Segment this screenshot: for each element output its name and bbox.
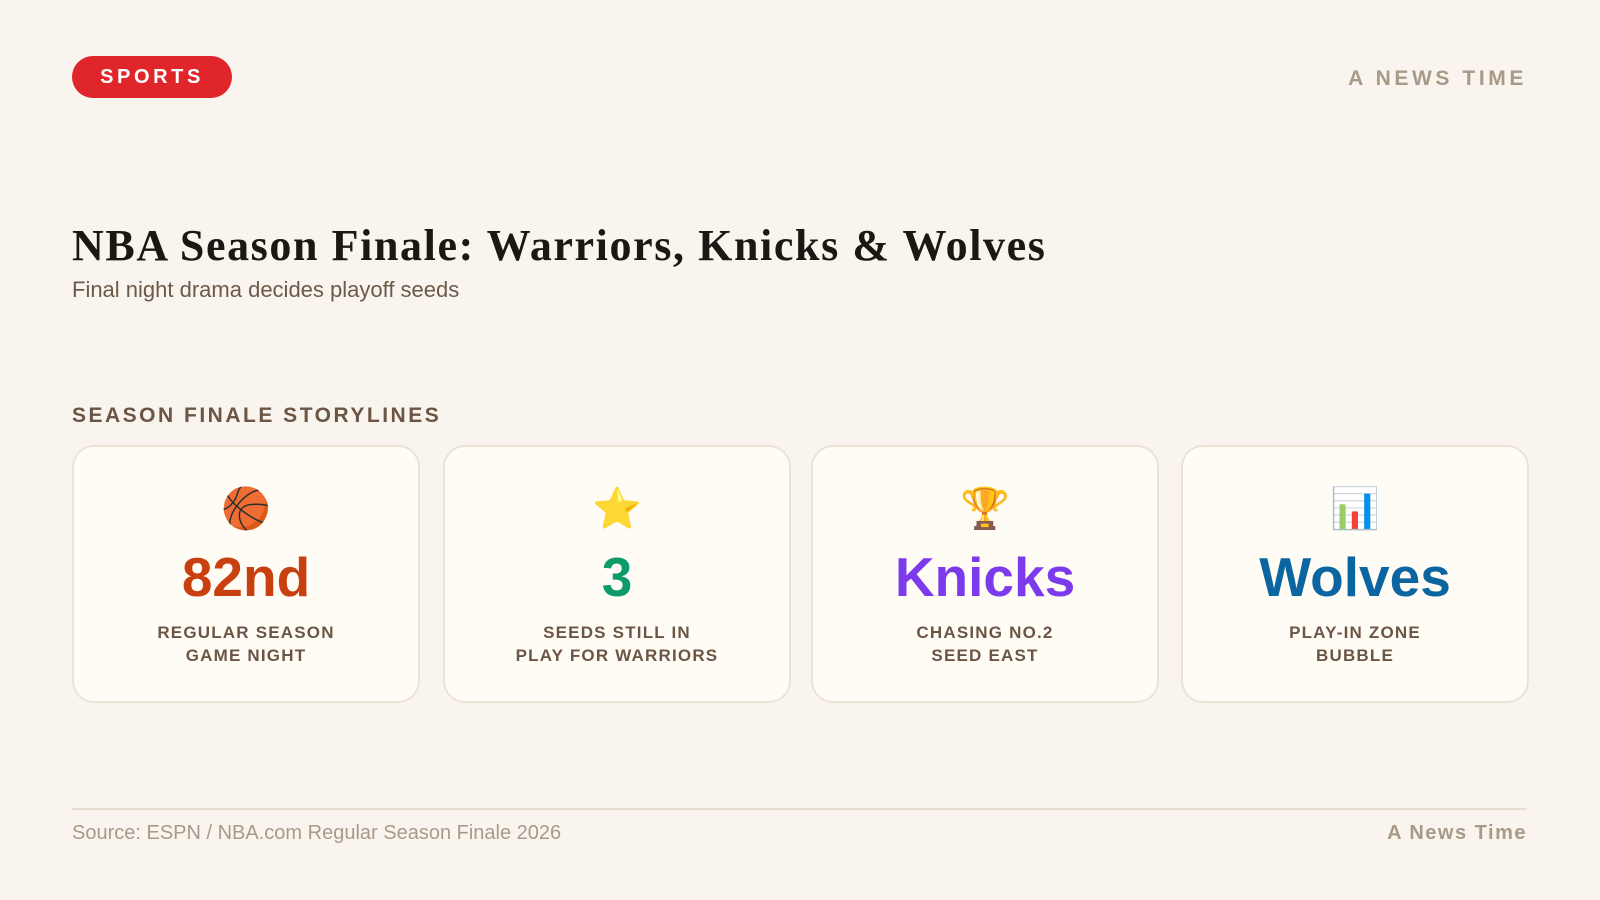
stat: Wolves: Wolves	[1259, 546, 1451, 608]
label: CHASING NO.2	[916, 623, 1054, 642]
card: Wolves	[1181, 445, 1529, 703]
label: BUBBLE	[1316, 646, 1394, 665]
label: SEEDS STILL IN	[543, 623, 691, 642]
label	[516, 623, 718, 665]
brand: A NEWS TIME	[1348, 67, 1527, 90]
label: REGULAR SEASON	[157, 623, 335, 642]
stat: 82nd: 82nd	[182, 546, 310, 608]
source: Source: ESPN / NBA.com Regular Season Finale 2026	[72, 822, 561, 844]
label: GAME NIGHT	[186, 646, 306, 665]
icon: chart: 📊	[1330, 487, 1380, 531]
label: PLAY FOR WARRIORS	[516, 646, 718, 665]
label: PLAY-IN ZONE	[1289, 623, 1421, 642]
title: NBA Season Finale: Warriors, Knicks & Wolves	[72, 221, 1047, 270]
card: Knicks	[811, 445, 1159, 703]
stat: Knicks: Knicks	[895, 546, 1075, 608]
label	[916, 623, 1054, 665]
badge: sports	[72, 56, 232, 98]
subtitle: Final night drama decides playoff seeds	[72, 277, 459, 302]
section heading: SEASON FINALE STORYLINES	[72, 404, 441, 427]
card: 82nd	[72, 445, 420, 703]
label	[1289, 623, 1421, 665]
icon: trophy: 🏆	[960, 487, 1010, 531]
icon: basketball: 🏀	[221, 487, 271, 531]
label: SEED EAST	[931, 646, 1039, 665]
badge: sports: SPORTS	[100, 66, 204, 88]
stat: 3: 3	[602, 546, 632, 608]
card: 3 seeds	[443, 445, 791, 703]
label	[157, 623, 335, 665]
footer brand: A News Time	[1387, 822, 1527, 844]
icon: star: ⭐	[592, 487, 642, 531]
